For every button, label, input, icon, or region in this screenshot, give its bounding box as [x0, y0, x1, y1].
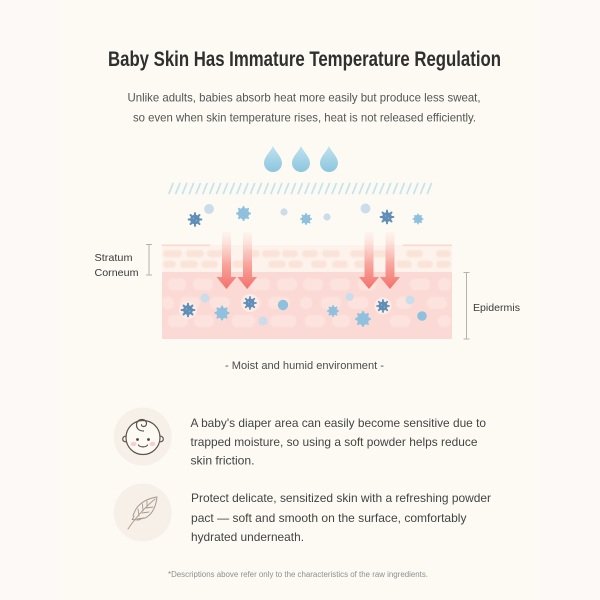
- icon: baby face: [114, 408, 172, 466]
- label: epidermis: [464, 272, 520, 339]
- moisture hatch band: [169, 184, 431, 194]
- label: stratum corneum: [94, 244, 152, 279]
- label: epidermis: Epidermis: [473, 302, 520, 314]
- text: powder pact: pact — soft and smooth on the surface, comfortably: [191, 511, 466, 525]
- skin diagram: [94, 146, 520, 339]
- viruses in epidermis: [179, 293, 427, 326]
- text: diaper area: trapped moisture, so using a soft powder helps reduce: [190, 435, 478, 449]
- benefit row: feather: [114, 484, 491, 544]
- intro text: Unlike adults, babies absorb heat more easily but produce less sweat,: [128, 90, 480, 104]
- label: stratum corneum: Stratum: [94, 252, 133, 264]
- label: stratum corneum: Corneum: [94, 267, 139, 279]
- viruses above skin: [189, 204, 423, 226]
- benefit row: baby: [114, 408, 486, 468]
- footnote: *Descriptions above refer only to the characteristics of the raw ingredients.: [168, 570, 428, 579]
- text: powder pact: [191, 491, 491, 544]
- icon: feather: [114, 484, 172, 542]
- text: diaper area: A baby's diaper area can easily become sensitive due to: [190, 416, 486, 430]
- epidermis layer: [162, 272, 452, 339]
- water drops: [264, 146, 338, 172]
- text: diaper area: [190, 416, 486, 468]
- diagram caption: - Moist and humid environment -: [225, 360, 384, 372]
- text: powder pact: hydrated underneath.: [191, 530, 304, 544]
- background panel: [60, 0, 540, 600]
- heat arrows: [216, 232, 400, 289]
- text: powder pact: Protect delicate, sensitized skin with a refreshing powder: [191, 491, 491, 505]
- stratum corneum layer: [162, 244, 452, 272]
- intro text: so even when skin temperature rises, heat is not released efficiently.: [133, 110, 476, 124]
- intro text: [128, 90, 480, 124]
- text: diaper area: skin friction.: [190, 454, 254, 468]
- title: Baby Skin Has Immature Temperature Regulation: [108, 48, 501, 71]
